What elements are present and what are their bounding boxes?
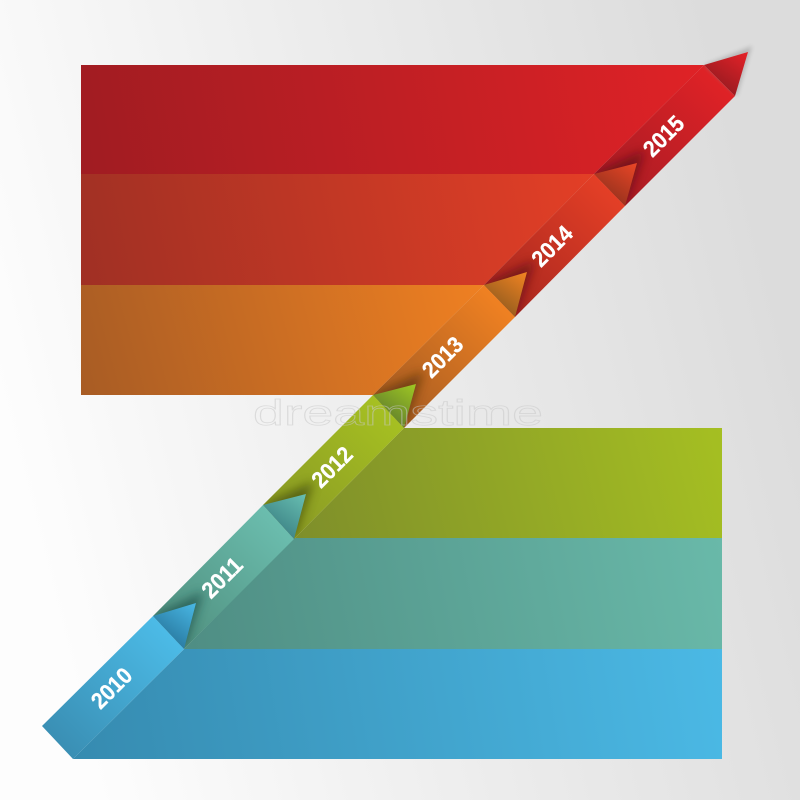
panel: green bar: [294, 428, 722, 539]
ribbon segment 2010: [42, 616, 184, 759]
label: 2015: 2015: [638, 110, 689, 162]
icon: fold arrow orange: [484, 272, 527, 317]
panel: teal bar: [184, 538, 722, 649]
ribbon segment 2013: [373, 285, 515, 428]
tip shadow: [704, 46, 752, 96]
icon: fold arrow green: [373, 384, 416, 428]
label: 2013: 2013: [417, 331, 468, 383]
panel: blue bar: [73, 649, 722, 759]
label: 2014: 2014: [526, 220, 578, 272]
icon: fold arrow red-orange: [594, 163, 637, 206]
ribbon segment 2012: [263, 395, 404, 539]
icon: fold arrow teal: [263, 494, 306, 539]
label: 2012: 2012: [306, 441, 358, 493]
ribbon segment 2011: [153, 505, 294, 649]
icon: fold arrow blue: [153, 603, 196, 649]
panel: orange bar: [81, 285, 484, 395]
panel: red-orange bar: [81, 174, 594, 285]
panel: red bar: [81, 65, 704, 174]
ribbon segment 2015: [594, 65, 735, 206]
label: 2010: 2010: [86, 662, 137, 714]
ribbon segment 2014: [484, 174, 625, 317]
watermark: dreamstime: [253, 392, 543, 433]
icon: fold arrow red tip: [704, 52, 748, 96]
label: 2011: 2011: [196, 552, 248, 603]
